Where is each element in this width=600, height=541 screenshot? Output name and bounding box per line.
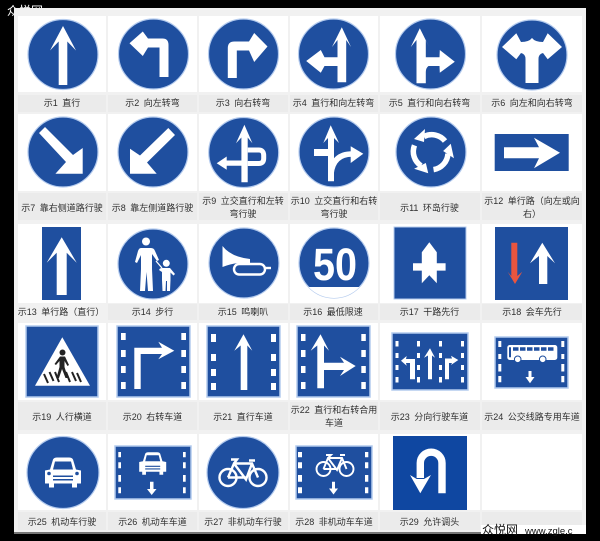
caption 9: 示9 立交直行和左转 xyxy=(202,195,284,206)
sign 16: minimum speed 50 xyxy=(299,228,369,298)
sign 4: straight and left xyxy=(298,19,368,89)
sign 5: straight and right xyxy=(396,19,466,89)
sign 28: non-motor vehicle lane xyxy=(296,446,372,499)
caption 9 xyxy=(202,195,284,219)
caption 10: 示10 立交直行和右转 xyxy=(291,195,377,206)
caption 6: 示6 向左和向右转弯 xyxy=(491,97,573,108)
sign 26: motor vehicle lane xyxy=(115,446,191,499)
sign 17: main road priority xyxy=(394,227,466,299)
caption 23: 示23 分向行驶车道 xyxy=(391,411,468,422)
caption 10 xyxy=(291,195,377,219)
sign 20: right turn lane xyxy=(117,326,190,397)
caption 12: 示12 单行路（向左或向 xyxy=(484,195,580,206)
sign 23: divided lanes xyxy=(392,333,468,390)
sign 18: priority over oncoming xyxy=(495,227,568,300)
caption 7: 示7 靠右侧道路行驶 xyxy=(21,202,103,213)
caption 19: 示19 人行横道 xyxy=(32,411,92,422)
caption 10: 弯行驶 xyxy=(320,208,348,219)
caption 9: 弯行驶 xyxy=(229,208,257,219)
sign 14: pedestrians xyxy=(118,229,188,299)
caption 24: 示24 公交线路专用车道 xyxy=(484,411,580,422)
sign 25: motor vehicles xyxy=(27,436,99,508)
caption 25: 示25 机动车行驶 xyxy=(28,516,96,527)
caption 22: 车道 xyxy=(325,417,343,428)
caption 20: 示20 右转车道 xyxy=(123,411,182,422)
sign 29: U-turn allowed xyxy=(393,436,467,510)
sign 1: straight xyxy=(28,20,98,90)
sign 7: keep right xyxy=(28,117,98,187)
caption 2: 示2 向左转弯 xyxy=(125,97,180,108)
sign 27: non-motor vehicles xyxy=(207,436,279,508)
caption 13: 示13 单行路（直行） xyxy=(18,306,104,317)
sign 16: minimum speed 50: 50 xyxy=(313,239,357,290)
sign 12: one way right xyxy=(495,134,569,171)
watermark: bottom right: 众悦网 xyxy=(482,523,518,537)
sign 3: turn right xyxy=(208,19,278,89)
watermark: bottom right: www.zgle.c xyxy=(524,526,573,537)
caption 18: 示18 会车先行 xyxy=(502,306,562,317)
sign 2: turn left xyxy=(118,19,188,89)
sign 6: left and right xyxy=(497,20,567,90)
caption 28: 示28 非机动车车道 xyxy=(295,516,373,527)
caption 26: 示26 机动车车道 xyxy=(118,516,187,527)
caption 29: 示29 允许调头 xyxy=(400,516,459,527)
caption 11: 示11 环岛行驶 xyxy=(400,202,459,213)
caption 21: 示21 直行车道 xyxy=(213,411,273,422)
caption 3: 示3 向右转弯 xyxy=(216,97,270,108)
sign 15: horn xyxy=(209,228,279,298)
caption 17: 示17 干路先行 xyxy=(400,306,459,317)
watermark: bottom right xyxy=(481,523,586,537)
sign 8: keep left xyxy=(118,117,188,187)
caption 22 xyxy=(291,404,377,428)
caption 15: 示15 鸣喇叭 xyxy=(218,306,268,317)
caption 27: 示27 非机动车行驶 xyxy=(204,516,282,527)
caption 16: 示16 最低限速 xyxy=(303,306,363,317)
caption 8: 示8 靠左侧道路行驶 xyxy=(112,202,193,213)
caption 5: 示5 直行和向右转弯 xyxy=(389,97,470,108)
watermark: top left: 众悦网 xyxy=(7,4,43,18)
caption 1: 示1 直行 xyxy=(44,97,80,108)
sign 11: roundabout xyxy=(396,117,466,187)
caption 22: 示22 直行和右转合用 xyxy=(291,404,377,415)
sign 22: straight and right lane xyxy=(297,326,370,397)
sign 10: interchange straight and right xyxy=(299,117,369,187)
sign 9: interchange straight and left xyxy=(209,118,279,188)
sign 19: pedestrian crossing xyxy=(26,326,98,397)
caption 12 xyxy=(484,195,580,219)
caption 4: 示4 直行和向左转弯 xyxy=(293,97,374,108)
sign 21: straight lane xyxy=(207,326,280,397)
caption 12: 右） xyxy=(523,208,541,219)
caption 14: 示14 步行 xyxy=(132,306,173,317)
sign 13: one way straight xyxy=(42,227,81,300)
sign 24: bus lane xyxy=(495,337,568,388)
